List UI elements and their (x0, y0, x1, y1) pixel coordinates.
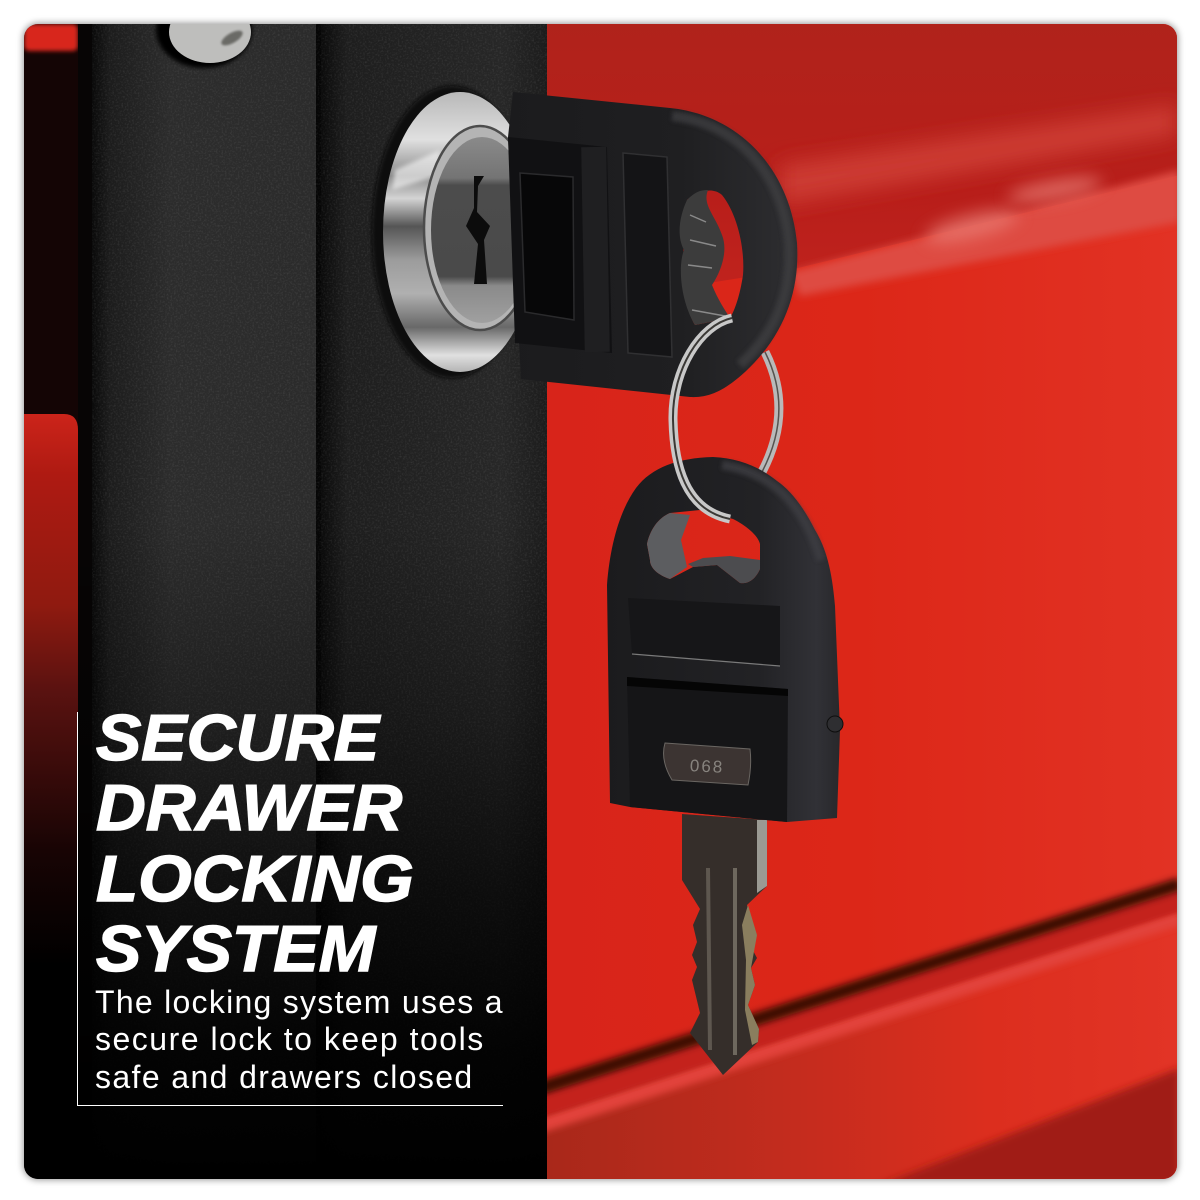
key ring back arc (762, 352, 779, 472)
hanging key head: 068 (689, 756, 725, 777)
body text: secure lock to keep tools (95, 1021, 485, 1057)
text block (77, 701, 504, 1106)
upper key head (508, 92, 797, 397)
hanging key blade (682, 814, 767, 1075)
hanging key head (607, 457, 843, 822)
body text: safe and drawers closed (95, 1059, 474, 1095)
cabinet screw (154, 24, 254, 70)
red drawers background (540, 20, 1180, 1185)
heading: SECURE (96, 701, 379, 774)
body text (95, 984, 504, 1095)
body text: The locking system uses a (95, 984, 504, 1020)
heading (96, 701, 414, 985)
black cabinet side (24, 24, 547, 1180)
frame lines (77, 712, 503, 1106)
heading: SYSTEM (96, 912, 375, 985)
heading: DRAWER (96, 771, 402, 844)
key ring front arc (673, 318, 732, 519)
heading: LOCKING (96, 842, 414, 915)
lock cylinder (370, 84, 514, 380)
